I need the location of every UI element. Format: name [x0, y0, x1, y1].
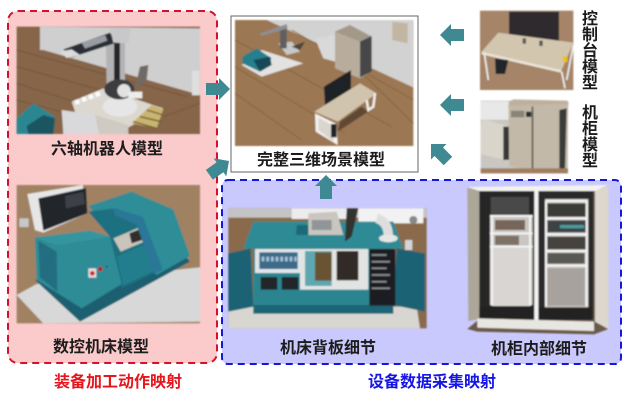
label: CNC lathe model: 数控机床模型 [53, 337, 149, 356]
arrow: data to scene [315, 175, 337, 199]
label: cabinet model: 柜 [582, 120, 598, 138]
caption: equipment data acquisition mapping: 设备数据采集映射 [368, 372, 496, 391]
label: cabinet model: 模 [582, 136, 598, 154]
caption: equipment action mapping: 装备加工动作映射 [54, 372, 182, 391]
panel: equipment data acquisition mapping [222, 180, 621, 364]
image: lathe back panel detail [228, 208, 427, 328]
label: control desk model: 台 [582, 41, 598, 60]
label: control desk model: 模 [582, 58, 598, 76]
label: complete 3D scene model: 完整三维场景模型 [257, 150, 385, 169]
label: cabinet model: 机 [582, 104, 598, 122]
label: control desk model: 型 [582, 74, 598, 92]
label: lathe back panel detail: 机床背板细节 [280, 338, 376, 357]
arrow: robot to scene [206, 78, 230, 100]
arrow: lathe to scene [203, 152, 235, 184]
arrow: cabinet to scene [440, 94, 464, 116]
image: cabinet interior detail [467, 185, 608, 334]
image: six-axis robot model [17, 27, 200, 134]
arrow: cabinet diagonal to scene [423, 136, 456, 169]
panel: complete 3D scene model [231, 16, 418, 172]
image: complete scene [235, 20, 413, 146]
label: control desk model: 制 [582, 26, 598, 44]
label: cabinet model: 型 [582, 152, 598, 170]
image: CNC lathe model [17, 185, 200, 323]
label: six-axis robot model: 六轴机器人模型 [51, 140, 163, 158]
image: control desk model [480, 11, 573, 90]
image: cabinet model [481, 99, 569, 173]
label: cabinet interior detail: 机柜内部细节 [491, 339, 587, 358]
arrow: control desk to scene [440, 24, 464, 46]
label: control desk model: 控 [582, 9, 598, 28]
panel: equipment action mapping [8, 11, 217, 363]
